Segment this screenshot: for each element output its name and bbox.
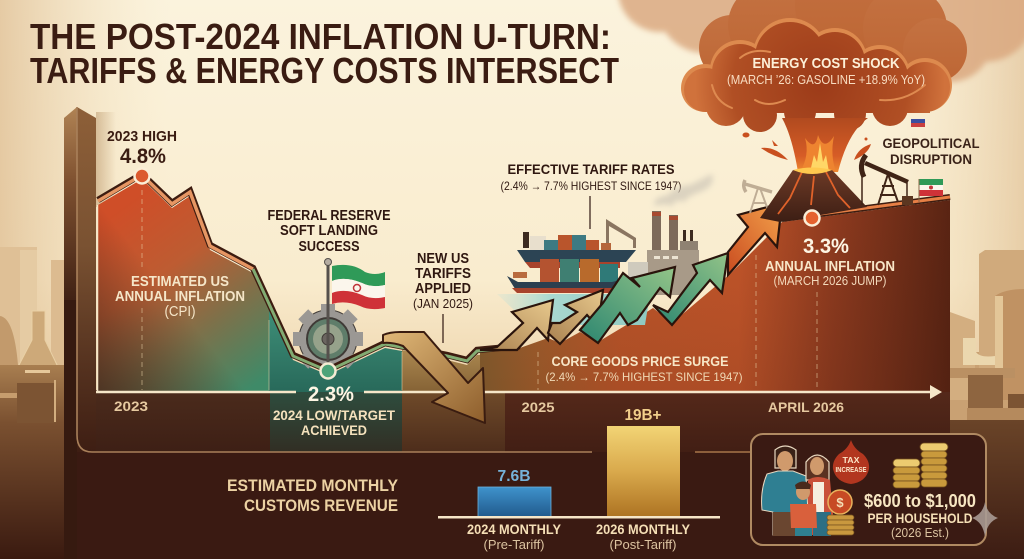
label: estimated annual inflation: ANNUAL INFLATION xyxy=(115,289,245,305)
arrow: down gold xyxy=(383,332,485,423)
icon: container ship xyxy=(507,219,636,293)
label: energy cost shock xyxy=(727,55,925,87)
icon: small pump jack xyxy=(744,180,772,213)
x axis xyxy=(96,205,942,399)
icon: coin stacks xyxy=(893,443,948,488)
icon: tax increase drop: TAX xyxy=(842,455,860,465)
axis year labels: 2025 xyxy=(522,399,555,415)
callout: new us tariffs: APPLIED xyxy=(415,280,471,297)
label: geopolitical disruption xyxy=(882,135,980,167)
label: 2.3% low: 2024 LOW/TARGET xyxy=(273,407,395,423)
bar chart: customs revenue xyxy=(438,407,720,552)
household text: PER HOUSEHOLD xyxy=(868,510,972,526)
bar labels: (Pre-Tariff) xyxy=(484,537,544,552)
cloud haze xyxy=(618,0,1024,82)
bar labels xyxy=(467,521,691,552)
inflation area chart xyxy=(98,179,950,392)
bar labels: 2026 MONTHLY xyxy=(596,521,691,537)
volcano plume xyxy=(782,118,868,172)
label: core goods price surge xyxy=(546,353,742,384)
label: 3.3% annual inflation xyxy=(765,235,895,288)
lava splashes xyxy=(742,132,871,160)
title: THE POST-2024 INFLATION U-TURN: xyxy=(30,16,611,57)
callout: federal reserve: SUCCESS xyxy=(298,238,360,255)
label: 2.3% low xyxy=(273,383,395,438)
axis year labels: APRIL 2026 xyxy=(768,399,844,415)
bar labels: 2024 MONTHLY xyxy=(467,521,562,537)
label: core goods price surge: CORE GOODS PRICE SURGE xyxy=(552,353,728,369)
title xyxy=(30,16,619,91)
left axis pillar xyxy=(64,107,752,559)
icon: family xyxy=(762,446,854,536)
label: 2.3% low: ACHIEVED xyxy=(301,422,367,438)
label: 3.3% annual inflation: (MARCH 2026 JUMP) xyxy=(774,273,886,288)
label: customs revenue xyxy=(227,476,399,515)
bar: 2026 monthly xyxy=(607,407,680,517)
label: customs revenue: CUSTOMS REVENUE xyxy=(244,496,398,515)
label: geopolitical disruption: GEOPOLITICAL xyxy=(882,135,980,151)
callout: new us tariffs xyxy=(413,250,473,343)
industrial silhouette right xyxy=(950,250,1024,559)
callout: effective tariff rates: EFFECTIVE TARIFF RATES xyxy=(508,161,674,177)
label: core goods price surge: (2.4% → 7.7% HIGHEST SINCE 1947) xyxy=(546,370,742,384)
label: 3.3% annual inflation: ANNUAL INFLATION xyxy=(765,259,895,275)
axis year labels xyxy=(114,398,844,415)
icon: gear xyxy=(293,304,363,374)
label: estimated annual inflation: ESTIMATED US xyxy=(131,274,229,290)
icon: pump jack xyxy=(861,155,913,205)
gridlines xyxy=(142,190,817,390)
callout: federal reserve xyxy=(268,207,390,255)
water xyxy=(497,294,650,325)
industrial silhouette left xyxy=(0,247,64,559)
callout: new us tariffs: NEW US xyxy=(417,250,469,267)
household text xyxy=(864,491,976,540)
callout: federal reserve: FEDERAL RESERVE xyxy=(268,207,390,224)
label: energy cost shock: (MARCH ’26: GASOLINE +18.9% YoY) xyxy=(727,72,925,87)
arrows: rising tan and green xyxy=(480,203,782,350)
callout: new us tariffs: (JAN 2025) xyxy=(413,296,473,311)
household text: (2026 Est.) xyxy=(891,526,949,540)
axis year labels: 2023 xyxy=(114,398,148,414)
icon: flag on pole xyxy=(324,258,385,368)
callout: effective tariff rates xyxy=(500,161,682,229)
title: TARIFFS & ENERGY COSTS INTERSECT xyxy=(30,50,619,91)
icon: factory xyxy=(628,174,713,295)
volcano eruption cloud xyxy=(681,0,967,132)
label: customs revenue: ESTIMATED MONTHLY xyxy=(227,476,399,495)
label: geopolitical disruption: DISRUPTION xyxy=(890,151,972,167)
icon: family: $ xyxy=(836,495,844,510)
icon: tax increase drop xyxy=(833,440,869,484)
sparkle mark xyxy=(972,502,998,537)
callout: new us tariffs: TARIFFS xyxy=(415,265,471,282)
icon: tax increase drop: INCREASE xyxy=(836,465,866,474)
label: 3.3% annual inflation: 3.3% xyxy=(803,235,849,258)
callout: effective tariff rates: (2.4% → 7.7% HIGHEST SINCE 1947) xyxy=(500,179,682,193)
flag: tiny xyxy=(911,119,925,127)
label: energy cost shock: ENERGY COST SHOCK xyxy=(752,55,900,72)
label: 2.3% low: 2.3% xyxy=(308,383,354,406)
marker: 2024 low xyxy=(320,364,336,378)
label: estimated annual inflation: (CPI) xyxy=(164,304,196,320)
callout: federal reserve: SOFT LANDING xyxy=(280,222,378,239)
lower panel band xyxy=(64,390,950,454)
callout: 2023 high: 4.8% xyxy=(120,145,166,168)
bottom section background xyxy=(64,452,950,559)
bar: 2024 monthly: 7.6B xyxy=(498,468,530,485)
marker: 3.3% xyxy=(804,210,820,226)
bar: 2026 monthly: 19B+ xyxy=(624,407,662,424)
flag: iran small xyxy=(919,179,943,202)
panel: household cost xyxy=(751,434,986,545)
volcano cone xyxy=(760,168,867,222)
callout: 2023 high: 2023 HIGH xyxy=(107,128,177,145)
bar labels: (Post-Tariff) xyxy=(610,537,676,552)
bar: 2024 monthly xyxy=(478,468,551,517)
callout: 2023 high xyxy=(107,128,177,184)
inflation line xyxy=(98,174,950,371)
household text: $600 to $1,000 xyxy=(864,491,976,511)
label: estimated annual inflation xyxy=(115,274,245,320)
